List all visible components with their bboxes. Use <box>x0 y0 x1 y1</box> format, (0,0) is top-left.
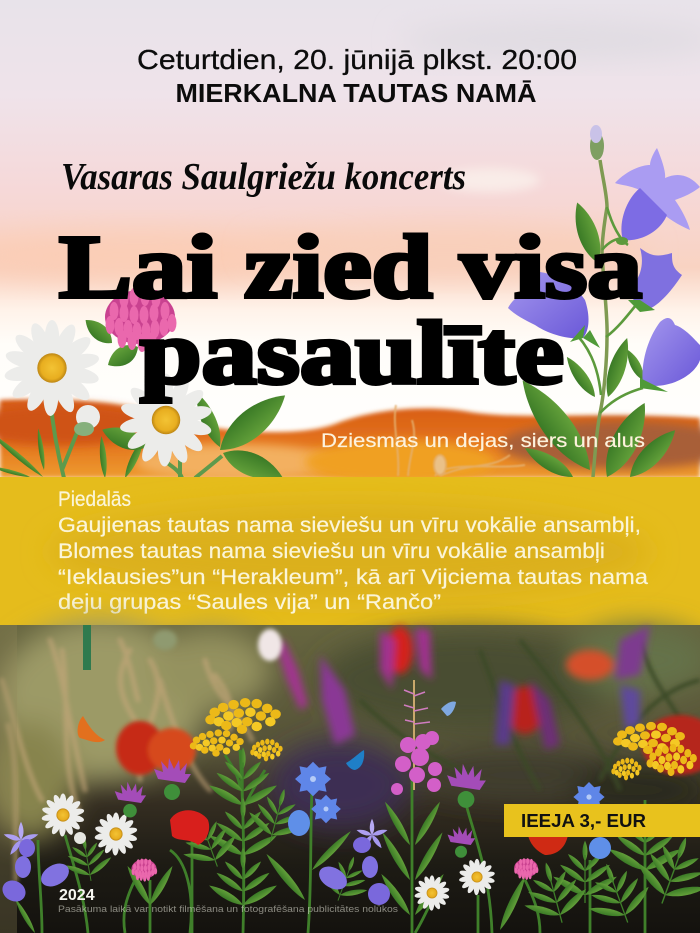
icon: chicory flowers <box>288 762 611 859</box>
icon: fireweed <box>391 680 442 795</box>
icon: daisies <box>41 793 495 911</box>
participants text: Piedalās <box>58 488 131 511</box>
title: date and time: Ceturtdien, 20. jūnijā plkst. 20:00 <box>137 44 577 75</box>
icon: butterflies <box>78 701 456 770</box>
green stake <box>83 625 91 670</box>
blurred poppies and vetches <box>116 625 700 775</box>
icon: thistles <box>115 758 486 858</box>
top bellflower <box>615 148 700 245</box>
icon: tansy clusters <box>190 698 697 780</box>
dry grass stalks <box>395 405 525 476</box>
middle bellflower <box>628 248 682 310</box>
panel: yellow participants band <box>0 477 700 625</box>
venue heading: MIERKALNA TAUTAS NAMĀ <box>176 78 537 108</box>
icon: clover blossoms <box>131 858 538 882</box>
icon: red poppy <box>170 810 209 845</box>
leaves <box>379 831 413 882</box>
participants text <box>58 488 648 614</box>
large bellflower <box>508 272 589 338</box>
blurred backdrop <box>0 620 700 840</box>
main title line 2: pasaulīte <box>140 304 564 403</box>
panel: sunset sky background <box>0 0 700 484</box>
stems <box>38 750 645 933</box>
panel: wildflower meadow <box>0 620 700 933</box>
disclaimer: Pasākuma laikā var notikt filmēšana un fotografēšana publicitātes nolūkos <box>58 904 398 915</box>
participants text: Blomes tautas nama sieviešu un vīru vokālie ansambļi <box>58 540 605 563</box>
dry grass stems <box>2 640 252 880</box>
icon: bellflower plant, right <box>508 125 700 484</box>
tagline: Dziesmas un dejas, siers un alus <box>321 430 645 452</box>
icon: daisies, clover and leaves, left <box>0 288 294 488</box>
panel: entry price: IEEJA 3,- EUR <box>521 811 646 831</box>
lower bellflower <box>642 318 700 386</box>
icon: meadow bellflowers <box>0 819 390 906</box>
year: 2024 <box>59 887 95 904</box>
participants text: “Ieklausies”un “Herakleum”, kā arī Vijciema tautas nama <box>58 566 648 589</box>
participants text: deju grupas “Saules vija” un “Rančo” <box>58 591 441 614</box>
main title line 1: Lai zied visa <box>59 218 642 317</box>
horizon landscape <box>0 400 700 484</box>
panel: entry price <box>504 804 700 837</box>
script subtitle: Vasaras Saulgriežu koncerts <box>61 156 466 198</box>
participants text: Gaujienas tautas nama sieviešu un vīru vokālie ansambļi, <box>58 514 641 537</box>
bud <box>74 405 100 436</box>
dark foliage strokes <box>360 640 700 790</box>
bud <box>590 125 604 160</box>
